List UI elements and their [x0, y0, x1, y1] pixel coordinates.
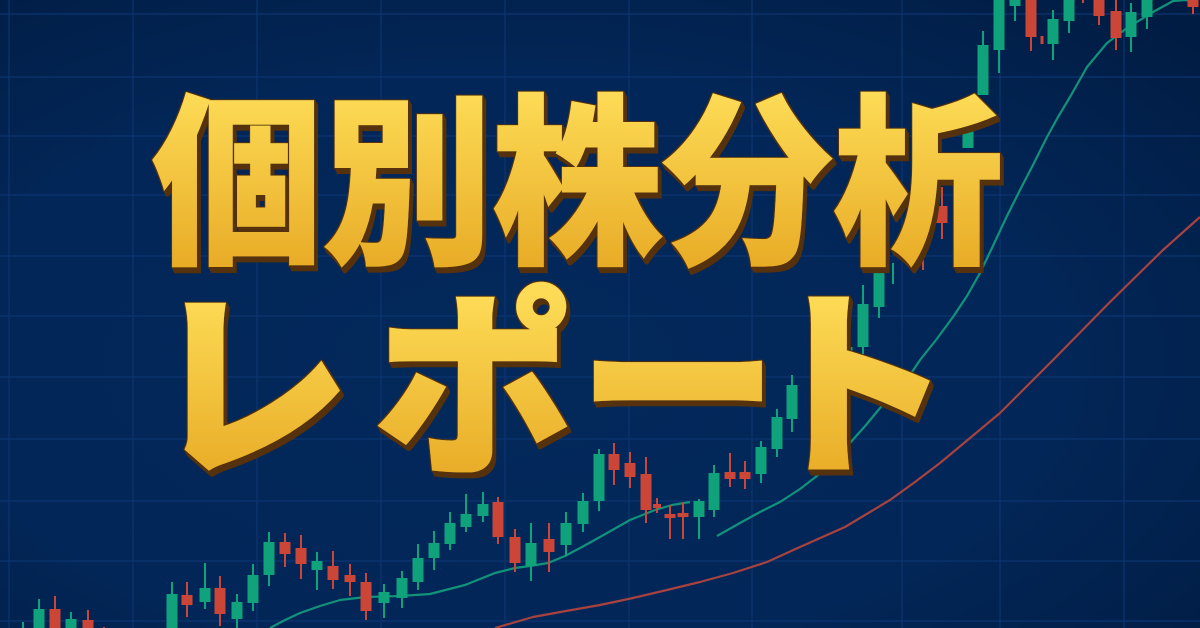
- title line 2: レポート: [150, 278, 952, 501]
- title line 1: 個別株分析: [152, 84, 1003, 288]
- red moving average line: [495, 217, 1200, 628]
- green moving average line: [270, 0, 1197, 628]
- title: [150, 84, 1003, 501]
